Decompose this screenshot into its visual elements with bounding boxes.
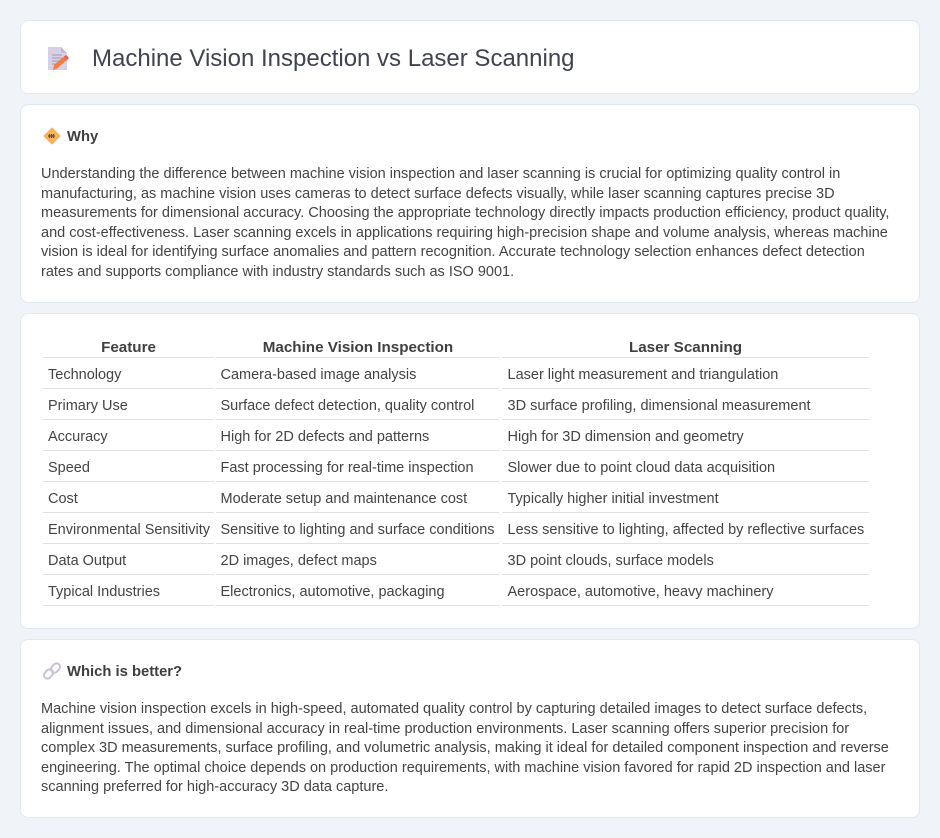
row: speed bbox=[48, 460, 775, 476]
row: primary use bbox=[48, 398, 811, 414]
text block: why bbox=[41, 166, 889, 280]
row: cost: Cost bbox=[48, 491, 78, 507]
panel: comparison table bbox=[20, 313, 920, 629]
row: cost bbox=[48, 491, 719, 507]
row: technology bbox=[48, 367, 778, 383]
text block: which is better: complex 3D measurements, surface profiling, and volumetric analysis, making it ideal for detailed component inspection and reverse bbox=[41, 740, 889, 756]
row: accuracy bbox=[48, 429, 744, 445]
table header row: Machine Vision Inspection bbox=[263, 339, 453, 356]
text block: which is better: Machine vision inspection excels in high-speed, automated quality control by capturing detailed images to detect surface defects, bbox=[41, 701, 867, 717]
text block: why: manufacturing, as machine vision uses cameras to detect surface defects visually, while laser scanning captures precise 3D bbox=[41, 186, 835, 202]
text block: which is better: scanning preferred for high-accuracy 3D data capture. bbox=[41, 779, 388, 795]
heading: why: Why bbox=[67, 129, 98, 145]
row: speed: Slower due to point cloud data acquisition bbox=[508, 460, 775, 476]
row: cost: Moderate setup and maintenance cost bbox=[220, 491, 467, 507]
table header row: Feature bbox=[101, 339, 156, 356]
row: technology: Technology bbox=[48, 367, 121, 383]
table header row: Laser Scanning bbox=[629, 339, 742, 356]
row: accuracy: Accuracy bbox=[48, 429, 108, 445]
text block: which is better: engineering. The optimal choice depends on production requirements, with machine vision favored for rapid 2D inspection and laser bbox=[41, 760, 885, 776]
text block: why: Understanding the difference between machine vision inspection and laser scanning is crucial for optimizing quality control in bbox=[41, 166, 840, 182]
panel: why bbox=[20, 104, 920, 303]
row: speed: Fast processing for real-time inspection bbox=[220, 460, 474, 476]
row: accuracy: High for 2D defects and patterns bbox=[220, 429, 429, 445]
row: accuracy: High for 3D dimension and geometry bbox=[508, 429, 744, 445]
text block: why: rates and supports compliance with industry standards such as ISO 9001. bbox=[41, 264, 514, 280]
heading: which is better: Which is better? bbox=[67, 664, 182, 680]
row: environmental sensitivity bbox=[48, 522, 864, 538]
row: data output bbox=[48, 553, 714, 569]
text block: why: measurements for dimensional accuracy. Choosing the appropriate technology directly impacts production efficiency, product quality, bbox=[41, 205, 889, 221]
row: technology: Camera-based image analysis bbox=[220, 367, 416, 383]
row: speed: Speed bbox=[48, 460, 90, 476]
text block: which is better bbox=[41, 701, 889, 795]
title: Machine Vision Inspection vs Laser Scanning bbox=[92, 45, 575, 72]
icon: link bbox=[43, 662, 61, 680]
text block: which is better: alignment issues, and dimensional accuracy in real-time production environments. Laser scanning offers superior precision for bbox=[41, 721, 849, 737]
row: data output: Data Output bbox=[48, 553, 126, 569]
row: environmental sensitivity: Less sensitive to lighting, affected by reflective surfaces bbox=[508, 522, 864, 538]
icon: warning diamond bbox=[44, 128, 60, 144]
row: typical industries: Typical Industries bbox=[48, 584, 160, 600]
row: environmental sensitivity: Environmental Sensitivity bbox=[48, 522, 210, 538]
row: typical industries: Electronics, automotive, packaging bbox=[220, 584, 445, 600]
text block: why: vision is ideal for identifying surface anomalies and pattern recognition. Accurate technology selection enhances defect detection bbox=[41, 244, 865, 260]
row: primary use: Surface defect detection, quality control bbox=[220, 398, 474, 414]
row: typical industries bbox=[48, 584, 774, 600]
row: technology: Laser light measurement and triangulation bbox=[508, 367, 778, 383]
panel: which is better bbox=[20, 639, 920, 818]
row: data output: 2D images, defect maps bbox=[220, 553, 377, 569]
panel: header bbox=[20, 20, 920, 94]
row: primary use: Primary Use bbox=[48, 398, 128, 414]
icon: document with pencil bbox=[48, 47, 69, 70]
row: primary use: 3D surface profiling, dimensional measurement bbox=[508, 398, 811, 414]
row: cost: Typically higher initial investment bbox=[508, 491, 719, 507]
text block: why: and cost-effectiveness. Laser scanning excels in applications requiring high-precision shape and volume analysis, whereas machine bbox=[41, 225, 888, 241]
row: typical industries: Aerospace, automotive, heavy machinery bbox=[508, 584, 773, 600]
table header row bbox=[101, 339, 742, 356]
row: environmental sensitivity: Sensitive to lighting and surface conditions bbox=[220, 522, 495, 538]
row: data output: 3D point clouds, surface models bbox=[508, 553, 714, 569]
